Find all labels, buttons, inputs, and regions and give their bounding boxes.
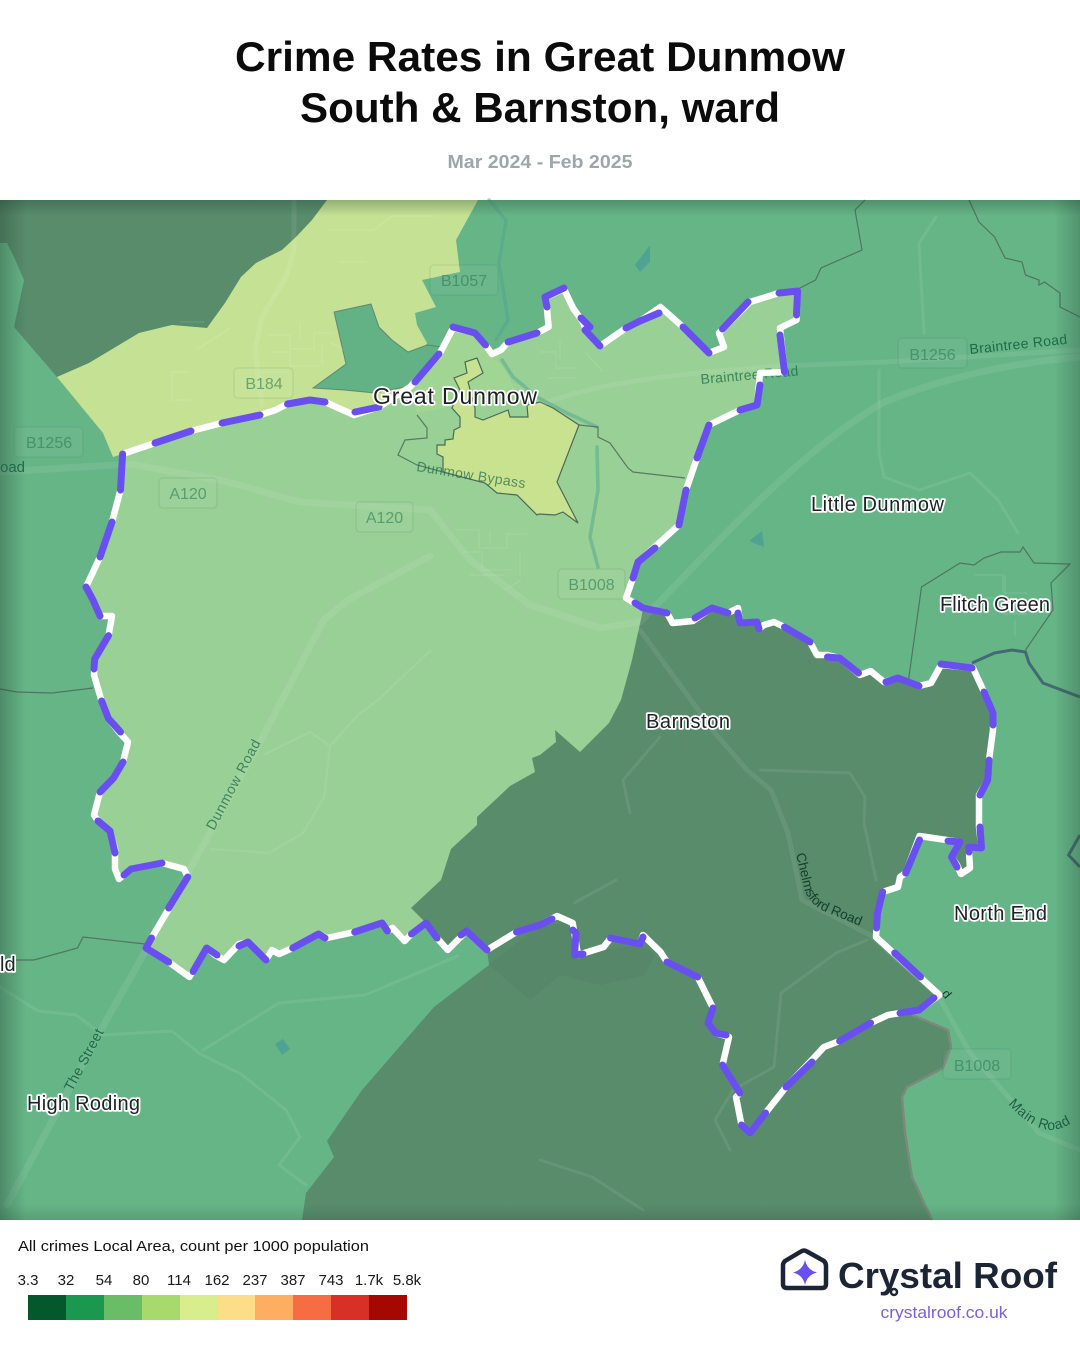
area: darker patch south of the ward	[489, 923, 655, 1000]
road number shields: B184	[245, 376, 283, 393]
road name labels: The Street	[61, 1026, 107, 1093]
road name labels: d	[939, 986, 955, 1001]
road name labels: Braintree Road	[700, 363, 799, 387]
road name labels	[0, 294, 1070, 1130]
legend values: 54	[96, 1272, 112, 1289]
legend values: 743	[318, 1272, 344, 1289]
road name labels: Chelmsford Road	[796, 853, 863, 926]
place name labels: Little Dunmow	[811, 494, 945, 516]
area: yellow central town zone	[437, 358, 579, 523]
legend values: 162	[204, 1272, 230, 1289]
legend values: 387	[280, 1272, 306, 1289]
legend values: 114	[167, 1272, 191, 1289]
place name labels: Flitch Green	[940, 594, 1050, 616]
area: yellow north-west zone	[57, 200, 478, 457]
ward boundary: white line	[86, 289, 993, 1133]
area: mid-green blob north of the town	[313, 304, 442, 393]
road name labels: Dunmow Road	[203, 737, 264, 832]
legend	[18, 1238, 422, 1320]
legend values	[18, 1272, 422, 1289]
road number shields: B1008	[954, 1058, 1000, 1075]
legend values: 237	[242, 1272, 268, 1289]
road number shields: B1008	[568, 577, 615, 594]
ward boundary: purple dashes	[86, 288, 993, 1133]
icon: house with star	[783, 1250, 826, 1288]
title	[235, 33, 845, 131]
map base area	[0, 200, 1080, 1220]
road name labels: Dunmow Bypass	[416, 458, 527, 491]
area: ward light green	[86, 289, 993, 1133]
area: tint north of town centre	[410, 328, 520, 413]
legend values: 5.8k	[393, 1272, 422, 1289]
parish boundaries	[0, 200, 1080, 960]
title: Crime Rates in Great Dunmow	[235, 33, 845, 80]
legend values: 32	[58, 1272, 74, 1289]
legend values: 80	[133, 1272, 149, 1289]
place name labels: Barnston	[646, 711, 730, 733]
road name labels: oad	[0, 459, 25, 476]
legend values: 3.3	[18, 1272, 38, 1289]
road number shields: A120	[169, 486, 207, 503]
road number shields: B1057	[441, 273, 487, 290]
legend values: 1.7k	[355, 1272, 384, 1289]
map edge vignette	[0, 200, 1080, 1220]
legend colour scale	[28, 1295, 407, 1320]
panel: choropleth map	[0, 198, 1080, 1220]
place name labels	[0, 383, 1050, 1115]
road number shields: A120	[366, 510, 403, 527]
wordmark: Crystal Roof	[838, 1255, 1058, 1296]
place name labels: Great Dunmow	[373, 383, 537, 409]
place name labels: North End	[954, 903, 1047, 925]
title: South & Barnston, ward	[300, 84, 780, 131]
logo: Crystal Roof	[783, 1250, 1058, 1322]
area: dark Barnston and southern zone	[302, 608, 993, 1220]
website address: crystalroof.co.uk	[880, 1303, 1008, 1322]
place name labels: ld	[0, 954, 16, 976]
subtitle: date range: Mar 2024 - Feb 2025	[448, 152, 632, 172]
road number shields: B1256	[26, 435, 72, 452]
town street patterns	[172, 216, 1027, 636]
legend heading: All crimes Local Area, count per 1000 population	[18, 1238, 369, 1255]
road number shields: B1256	[909, 347, 956, 364]
road name labels: Braintree Road	[969, 331, 1068, 357]
area: dark north-west low crime zone	[0, 200, 327, 377]
place name labels: High Roding	[27, 1093, 140, 1115]
district boundary: heavy line east	[972, 650, 1080, 867]
road number shields	[14, 265, 1011, 1079]
road network	[0, 200, 1080, 1210]
water: ponds and streams	[275, 200, 764, 1055]
zone edge: grey line south-east	[902, 1015, 951, 1220]
road name labels: Main Road	[1009, 1098, 1070, 1130]
